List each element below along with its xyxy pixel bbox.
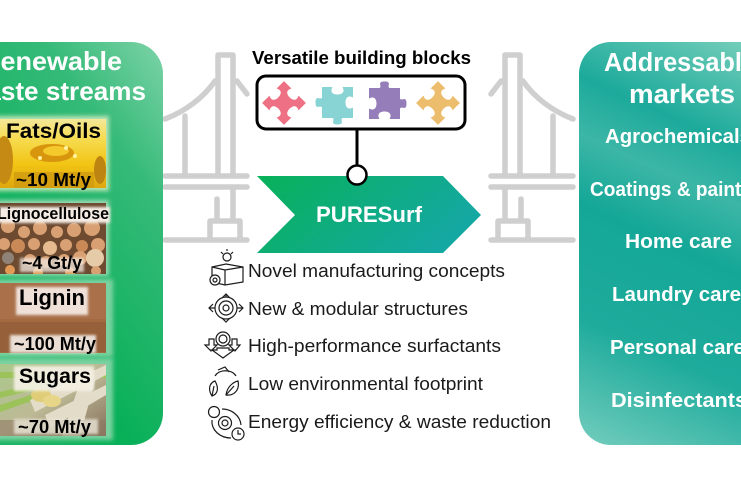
panel: renewable waste streams	[0, 42, 163, 445]
feedstock: sugars: ~70 Mt/y	[18, 417, 91, 437]
market list: Personal care	[610, 336, 741, 359]
bridge: right	[491, 55, 573, 240]
feedstock: lignocellulose: ~4 Gt/y	[22, 253, 82, 273]
benefit: new and modular structures	[209, 294, 468, 322]
benefit: novel manufacturing concepts	[210, 249, 505, 285]
feedstock: lignin	[0, 279, 113, 357]
puzzle piece: teal	[316, 87, 353, 124]
benefit: high-performance surfactants: High-performance surfactants	[248, 336, 501, 356]
icon: coin and arrows	[205, 332, 240, 358]
panel: addressable markets	[579, 42, 741, 445]
benefit: energy efficiency and waste reduction	[208, 406, 551, 440]
benefit: new and modular structures: New & modular structures	[248, 299, 468, 319]
feedstock: lignin: Lignin	[19, 285, 85, 310]
puzzle piece: purple	[369, 82, 406, 119]
puzzle piece: pink	[262, 81, 306, 125]
benefit: novel manufacturing concepts: Novel manufacturing concepts	[248, 261, 505, 281]
benefit: energy efficiency and waste reduction: Energy efficiency & waste reduction	[248, 412, 551, 432]
feedstock: sugars: Sugars	[19, 365, 91, 388]
benefit: low environmental footprint: Low environmental footprint	[248, 374, 483, 394]
benefit: low environmental footprint	[210, 367, 483, 396]
feedstock: lignocellulose	[0, 200, 110, 277]
connector node	[348, 166, 366, 184]
connector line	[356, 129, 358, 166]
heading: addressable markets	[604, 49, 741, 109]
heading: versatile building blocks: Versatile building blocks	[252, 48, 471, 68]
benefit: high-performance surfactants	[205, 332, 501, 358]
feedstock: fats and oils: Fats/Oils	[6, 120, 101, 143]
benefits list	[205, 249, 551, 440]
PURESurf arrow	[257, 176, 481, 253]
heading: addressable markets: markets	[629, 79, 735, 109]
icon: coin, gear, clock	[208, 406, 244, 440]
market list: Home care	[625, 230, 732, 253]
heading: renewable waste streams	[0, 46, 146, 106]
feedstock: lignocellulose: Lignocellulose	[0, 205, 109, 223]
market list	[590, 125, 741, 412]
icon: modular target	[209, 294, 243, 322]
building blocks box	[257, 76, 465, 129]
market list: Laundry care	[612, 283, 741, 306]
icon: box with bulb	[210, 249, 243, 285]
market list: Disinfectants	[611, 389, 741, 412]
icon: leaves cycle	[210, 367, 238, 396]
feedstock: fats and oils	[0, 116, 109, 191]
feedstock: fats and oils: ~10 Mt/y	[16, 170, 91, 190]
bridge: left	[165, 55, 247, 240]
PURESurf arrow: PURESurf	[316, 202, 422, 227]
feedstock: lignin: ~100 Mt/y	[14, 334, 96, 354]
feedstock: sugars	[0, 358, 113, 440]
puzzle piece: orange	[416, 81, 460, 125]
